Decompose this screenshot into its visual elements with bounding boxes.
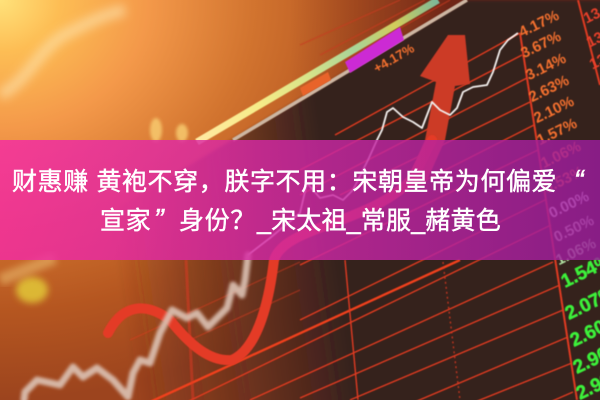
title line 2: [100, 204, 501, 236]
title line 1: 财惠赚 黄袍不穿，朕字不用：宋朝皇帝为何偏爱: [12, 168, 557, 196]
percentage labels: [371, 5, 600, 269]
title line 2: _宋太祖_常服_赭黄色: [257, 207, 501, 235]
red arrow: [405, 35, 470, 185]
red curve: [108, 140, 432, 360]
percentage labels: 0.00%: [546, 188, 592, 222]
grid lines: [130, 0, 600, 400]
percentage labels: 1.06%: [553, 235, 599, 269]
percentage labels: +4.17%: [371, 40, 417, 76]
percentage labels: 1.06%: [538, 138, 584, 172]
percentage labels: 2.10%: [531, 93, 577, 127]
percentage labels: 4.17%: [516, 7, 562, 41]
white price line lower: [24, 255, 248, 400]
green percentage labels: [558, 250, 600, 400]
white price line upper: [248, 33, 518, 255]
title line 1: “: [574, 165, 584, 197]
percentage labels: 0.50%: [551, 212, 597, 246]
percentage labels: 2.63%: [526, 72, 572, 106]
title line 2: ”: [154, 204, 164, 236]
pink banner: [0, 140, 600, 260]
chart band: multicolour strip and grey rail: [0, 0, 467, 303]
percentage labels: 1.57%: [534, 115, 580, 149]
title line 2: 身份？: [179, 207, 256, 235]
faint pale streak top-left: [0, 10, 125, 95]
title line 2: 宣家: [100, 207, 151, 235]
percentage labels: 0.53%: [541, 163, 587, 197]
percentage labels: 3.14%: [523, 50, 569, 84]
percentage labels: 3.67%: [518, 28, 564, 62]
